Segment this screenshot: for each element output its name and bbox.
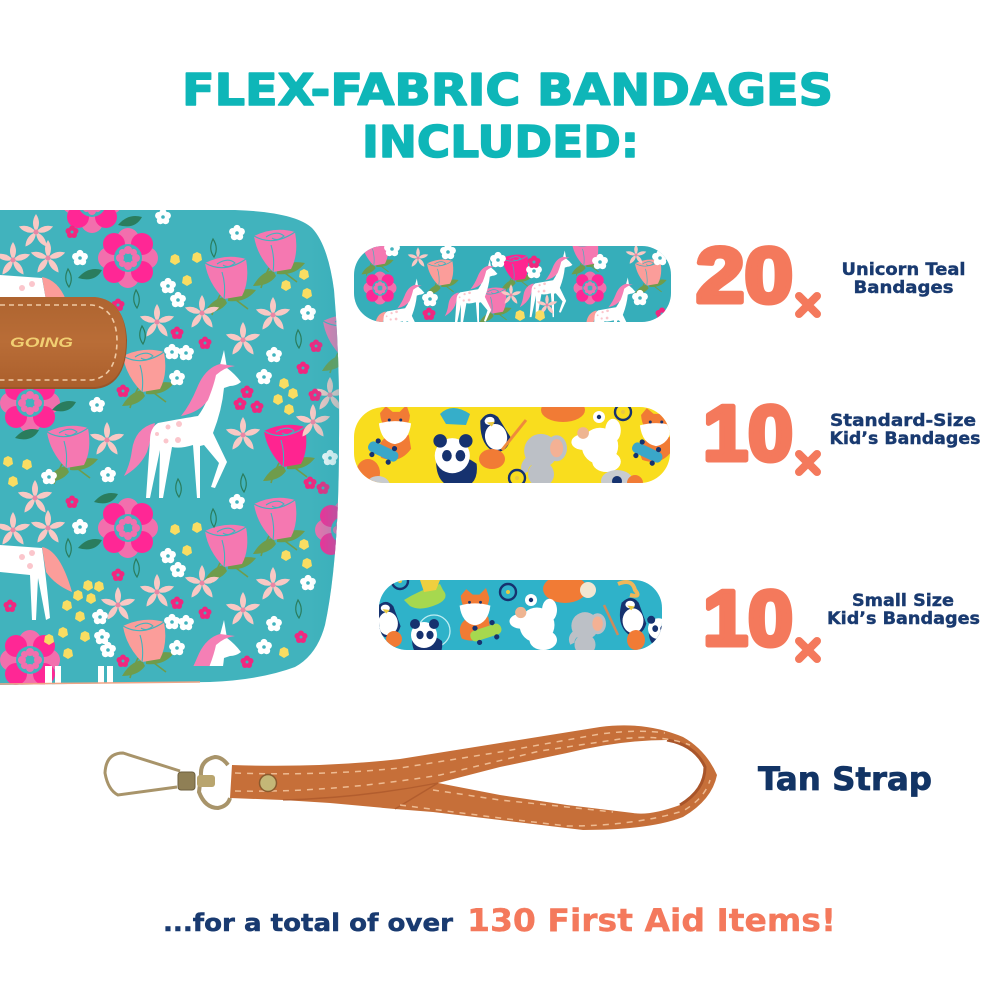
count: 10x small: [703, 574, 824, 666]
title: FLEX-FABRIC BANDAGES: [182, 65, 833, 116]
strap fold shadow: [283, 783, 438, 809]
panel: teal unicorn bag: [0, 210, 340, 685]
strap stitching: [235, 731, 710, 826]
GOING brand text: GOING: [10, 335, 74, 350]
footer text: for a total of over: ...for a total of over: [163, 909, 453, 937]
thin orange bag edge: [0, 682, 200, 684]
label: unicorn teal bandages: Unicorn Teal: [842, 260, 966, 279]
bottom unicorn legs: [45, 666, 113, 686]
count: 20x: 20: [696, 231, 793, 319]
title: [182, 65, 833, 168]
bandage: yellow kid's standard: [354, 407, 670, 483]
title: INCLUDED:: [362, 117, 639, 168]
count: 10x small: 10: [703, 574, 793, 662]
leaves on bag: [15, 216, 301, 618]
bandage: unicorn teal: [354, 246, 671, 322]
count: 10x standard: 10: [703, 389, 793, 477]
roses on bag: [47, 230, 338, 678]
label: standard-size kid's bandages: Standard-Size: [830, 411, 976, 430]
leather tab with GOING label: [0, 297, 127, 389]
small blossoms on bag: [3, 209, 338, 668]
label: small size kid's bandages: [827, 591, 980, 628]
strap loop body: [230, 725, 717, 830]
label: tan strap: Tan Strap: [758, 760, 932, 798]
label: standard-size kid's bandages: [830, 411, 981, 448]
main unicorn on bag: [124, 350, 241, 498]
snap hook clasp: [105, 753, 230, 808]
lower unicorn head on bag: [194, 620, 241, 666]
upper left partial unicorn: [0, 275, 65, 297]
label: small size kid's bandages: Kid’s Bandages: [827, 609, 980, 628]
bandage: blue kid's small: [379, 580, 662, 650]
label: standard-size kid's bandages: Kid’s Bandages: [830, 429, 981, 448]
rivet: [260, 774, 276, 792]
flowers on bag: [0, 173, 375, 690]
label: unicorn teal bandages: Bandages: [854, 278, 954, 297]
label: unicorn teal bandages: [842, 260, 966, 297]
tan strap: [105, 725, 717, 830]
footer text: 130 first aid items: 130 First Aid Items!: [467, 903, 836, 939]
lower left partial unicorn: [0, 545, 72, 620]
star flowers on bag: [0, 214, 348, 626]
label: small size kid's bandages: Small Size: [852, 591, 954, 610]
count: 20x: [696, 231, 824, 321]
